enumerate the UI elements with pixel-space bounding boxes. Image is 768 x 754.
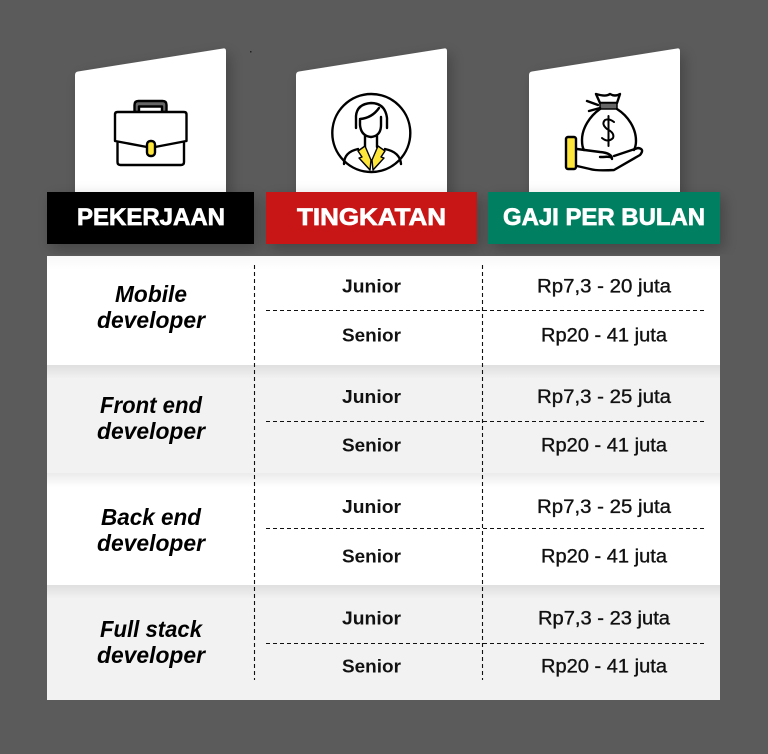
header: tingkatan xyxy=(266,192,477,244)
table panel xyxy=(47,256,720,700)
row: mobile developer: Mobile xyxy=(115,281,187,307)
row: front end developer xyxy=(47,365,720,473)
row: full stack developer: Junior xyxy=(342,608,401,628)
card: person xyxy=(296,48,447,200)
row: back end developer: Junior xyxy=(342,496,401,517)
row: full stack developer: Senior xyxy=(342,656,401,676)
header: gaji per bulan: GAJI PER BULAN xyxy=(503,204,705,231)
header: tingkatan: TINGKATAN xyxy=(297,204,446,231)
row: full stack developer: Rp20 - 41 juta xyxy=(541,656,667,678)
row: front end developer: Rp7,3 - 25 juta xyxy=(537,387,671,408)
header: pekerjaan xyxy=(47,192,254,244)
row: back end developer: Back end xyxy=(101,504,202,530)
icon: person in circle xyxy=(332,94,410,172)
row: front end developer: developer xyxy=(97,418,206,444)
row: mobile developer xyxy=(47,256,720,365)
row: front end developer: Front end xyxy=(100,392,203,418)
row: mobile developer: Rp20 - 41 juta xyxy=(541,326,667,346)
speck xyxy=(250,51,252,52)
icon: briefcase xyxy=(115,101,186,165)
row: full stack developer: developer xyxy=(97,642,206,668)
row: full stack developer: Full stack xyxy=(100,616,203,642)
row: front end developer: Rp20 - 41 juta xyxy=(541,436,667,456)
row: full stack developer xyxy=(47,585,720,700)
row: back end developer: Rp20 - 41 juta xyxy=(541,546,667,568)
icon: money bag on hand xyxy=(566,94,642,170)
row: mobile developer: Junior xyxy=(342,276,401,296)
row: back end developer xyxy=(47,473,720,585)
header: pekerjaan: PEKERJAAN xyxy=(77,204,225,231)
row: front end developer: Junior xyxy=(342,386,401,407)
card: briefcase xyxy=(75,48,226,200)
row: mobile developer: developer xyxy=(97,307,206,333)
row: back end developer: Rp7,3 - 25 juta xyxy=(537,497,671,518)
row: mobile developer: Senior xyxy=(342,324,401,346)
header: gaji per bulan xyxy=(488,192,720,244)
row: front end developer: Senior xyxy=(342,434,401,456)
row: back end developer: developer xyxy=(97,530,206,556)
row: back end developer: Senior xyxy=(342,546,401,566)
card: money xyxy=(529,48,680,200)
row: mobile developer: Rp7,3 - 20 juta xyxy=(537,276,671,298)
row: full stack developer: Rp7,3 - 23 juta xyxy=(538,608,670,630)
